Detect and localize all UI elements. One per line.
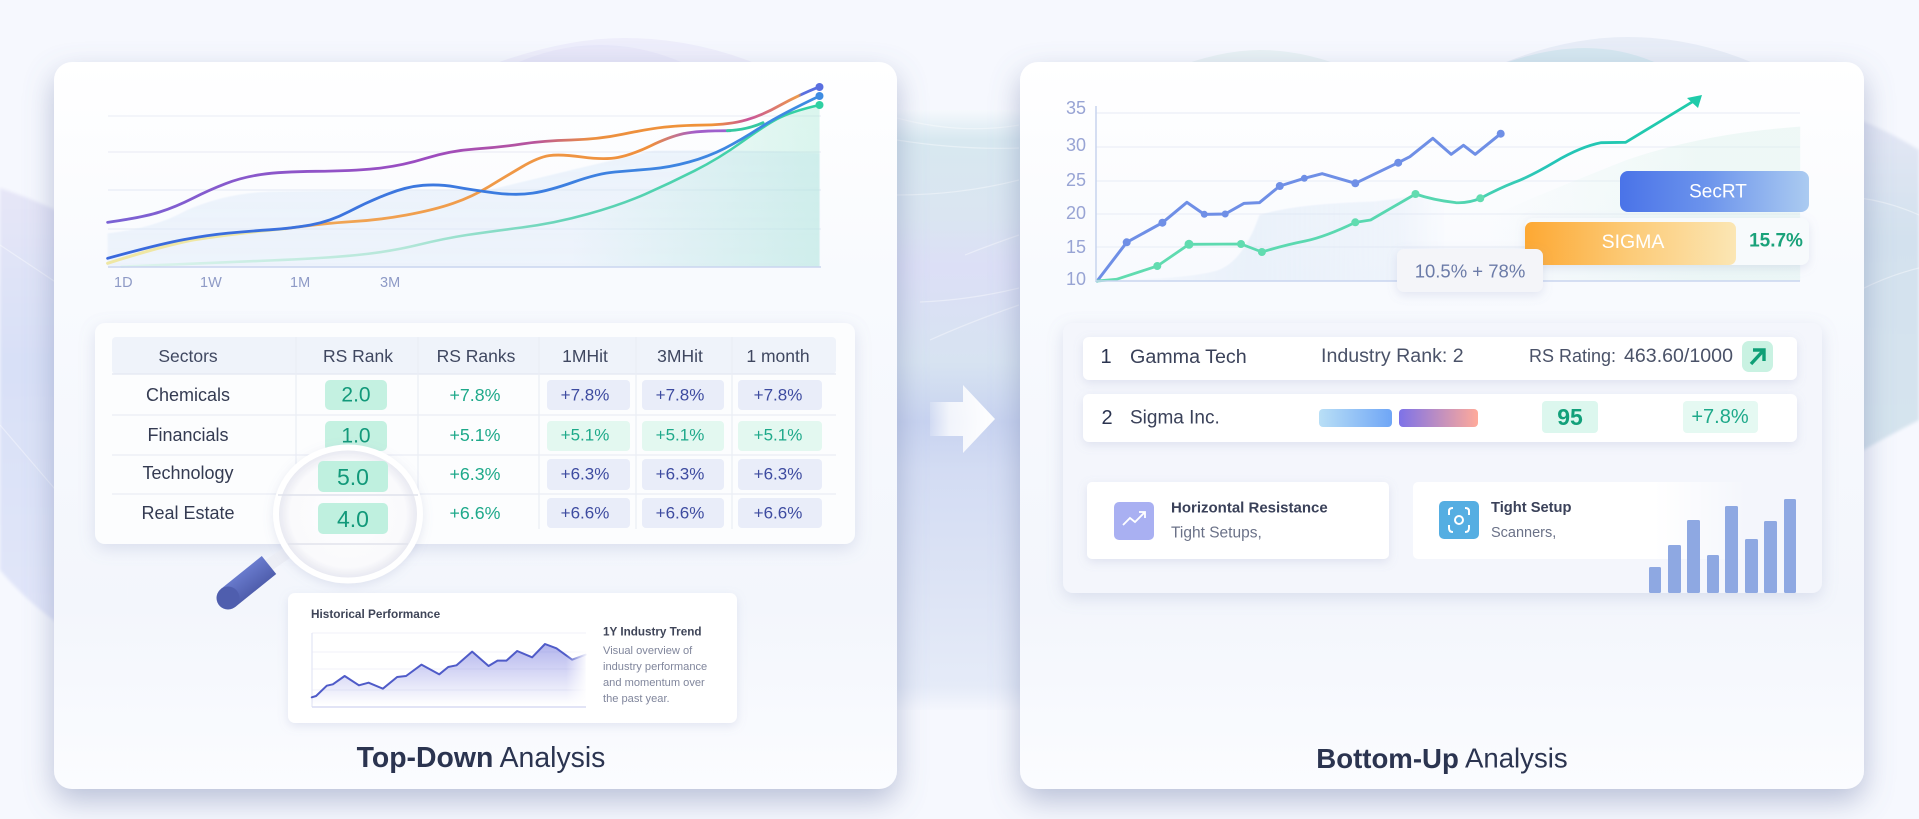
sector ranking table: +5.1% <box>561 426 609 444</box>
label: SIGMA 15.7%: SIGMA <box>1602 231 1664 253</box>
sector ranking table: Real Estate <box>141 503 235 523</box>
sector ranking table: +6.6% <box>754 504 802 522</box>
sector ranking table: +6.6% <box>561 504 609 522</box>
text: 1Y industry trend note <box>603 626 707 705</box>
icon: up-right arrow <box>1751 350 1764 364</box>
icon: magnifying glass <box>216 448 420 610</box>
card: Tight Setup: Tight Setup <box>1491 500 1572 516</box>
card: Tight Setup: Scanners, <box>1491 525 1556 541</box>
chart: stock price lines: 25 <box>1066 170 1086 190</box>
sector ranking table: Financials <box>147 425 229 445</box>
row: Gamma Tech: Gamma Tech <box>1130 346 1247 368</box>
callout: 10.5% + 78% <box>1397 249 1543 292</box>
sector ranking table: +5.1% <box>754 426 802 444</box>
sector ranking table: +6.3% <box>561 464 609 484</box>
center arrow <box>930 385 995 453</box>
sector ranking table: RS Rank <box>323 346 393 366</box>
sector ranking table: 2.0 <box>341 384 371 406</box>
chart: multi-line sector performance: 1M <box>290 275 310 291</box>
text: 1Y industry trend note: 1Y Industry Trend <box>603 626 702 638</box>
row: Gamma Tech: 1 <box>1100 346 1112 368</box>
row: Gamma Tech: 463.60/1000 <box>1624 345 1733 367</box>
sector ranking table: +5.1% <box>450 425 501 445</box>
sector ranking table: 1MHit <box>562 346 608 366</box>
text: 1Y industry trend note: industry performance <box>603 661 707 673</box>
chart: multi-line sector performance <box>108 83 823 291</box>
card: Horizontal Resistance: Tight Setups, <box>1171 524 1262 542</box>
icon: magnifying glass: 4.0 <box>337 506 369 532</box>
sector ranking table: +5.1% <box>656 426 704 444</box>
row: Sigma Inc.: Sigma Inc. <box>1130 408 1220 428</box>
sector ranking table: +6.3% <box>656 464 704 484</box>
icon: trend line <box>1114 502 1154 540</box>
sector ranking table: Sectors <box>158 346 218 366</box>
sector ranking table: +7.8% <box>450 385 501 405</box>
panel: bottom-up analysis <box>1020 62 1864 789</box>
row: Sigma Inc.: 2 <box>1101 407 1113 429</box>
panel: top-down analysis <box>54 62 897 789</box>
sector ranking table: 3MHit <box>657 346 703 366</box>
chart: stock price lines: 15 <box>1066 237 1086 257</box>
stock list card <box>1063 323 1822 593</box>
chart: stock price lines: 10 <box>1066 269 1086 289</box>
chart: stock price lines: 35 <box>1066 98 1086 118</box>
sector ranking table: +7.8% <box>561 386 609 404</box>
icon: magnifying glass: 5.0 <box>337 464 369 490</box>
chart: stock price lines: 20 <box>1066 203 1086 223</box>
chart: multi-line sector performance: 1W <box>200 275 222 291</box>
sector ranking table: RS Ranks <box>437 346 516 366</box>
card: historical performance: Historical Performance <box>311 607 441 621</box>
bar chart <box>1649 499 1796 593</box>
icon: scanner <box>1439 501 1479 539</box>
row: Sigma Inc. <box>1083 394 1797 442</box>
text: 1Y industry trend note: Visual overview of <box>603 645 693 657</box>
row: Sigma Inc.: +7.8% <box>1691 406 1749 428</box>
sector ranking table: +7.8% <box>656 386 704 404</box>
card: Horizontal Resistance <box>1087 482 1389 559</box>
sector ranking table: +6.3% <box>450 464 501 484</box>
sector ranking table <box>95 323 855 544</box>
card: Tight Setup <box>1413 482 1748 559</box>
text: 1Y industry trend note: the past year. <box>603 693 670 705</box>
card: Horizontal Resistance: Horizontal Resistance <box>1171 500 1328 516</box>
sector ranking table: +7.8% <box>754 386 802 404</box>
chart: multi-line sector performance: 1D <box>114 275 133 291</box>
sector ranking table: Technology <box>142 463 234 483</box>
sector ranking table: +6.6% <box>656 504 704 522</box>
text: 1Y industry trend note: and momentum over <box>603 677 705 689</box>
chart: stock price lines <box>1066 95 1800 289</box>
label: SIGMA 15.7%: 15.7% <box>1749 230 1803 252</box>
sector ranking table: +6.3% <box>754 464 802 484</box>
row: Gamma Tech: RS Rating: <box>1529 346 1616 366</box>
label: SIGMA 15.7% <box>1525 218 1809 265</box>
chart: stock price lines: 30 <box>1066 135 1086 155</box>
label: SecRT: SecRT <box>1689 182 1747 202</box>
card: historical performance <box>288 593 737 723</box>
callout: 10.5% + 78%: 10.5% + 78% <box>1415 260 1525 282</box>
sector ranking table: +6.6% <box>450 503 501 523</box>
heading: Bottom-Up Analysis: Bottom-Up Analysis <box>1316 742 1568 774</box>
row: Gamma Tech: Industry Rank: 2 <box>1321 345 1464 367</box>
row: Sigma Inc.: 95 <box>1557 404 1583 430</box>
chart: 1Y industry trend line <box>312 633 588 708</box>
heading: Top-Down Analysis: Top-Down Analysis <box>357 742 605 774</box>
sector ranking table: 1.0 <box>341 424 371 448</box>
row: Gamma Tech <box>1083 337 1797 380</box>
sector ranking table: Chemicals <box>146 385 230 405</box>
label: SecRT <box>1620 171 1809 212</box>
chart: multi-line sector performance: 3M <box>380 275 400 291</box>
sector ranking table: 1 month <box>746 346 810 366</box>
